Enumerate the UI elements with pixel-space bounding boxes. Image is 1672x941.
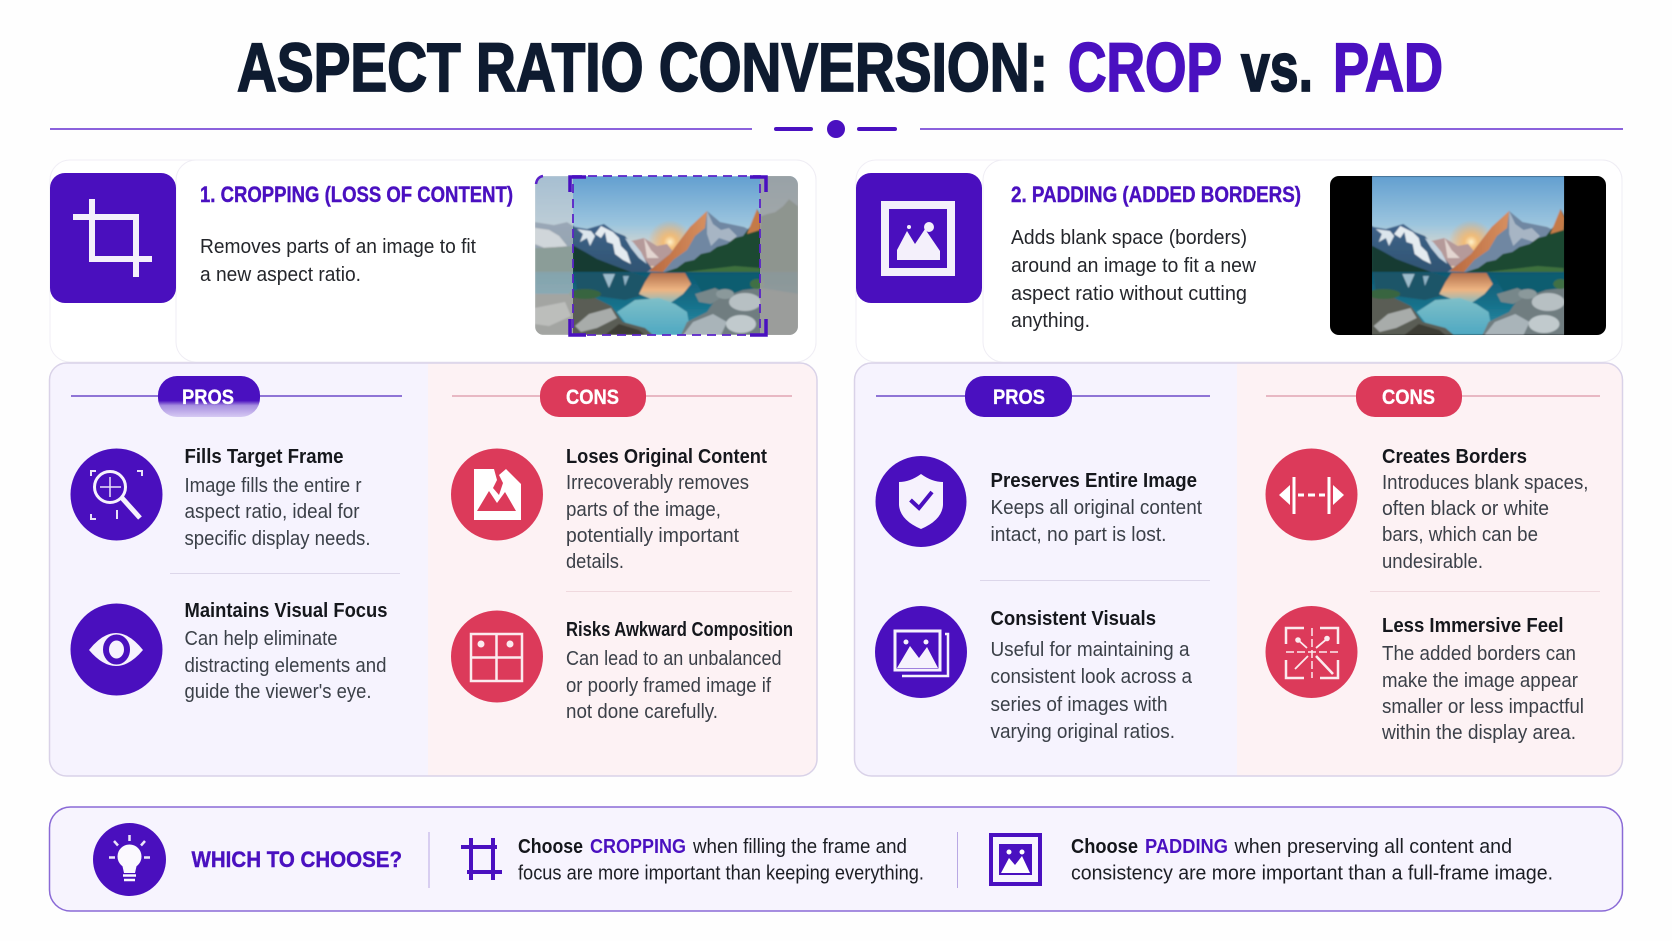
con item: risks awkward composition: Can lead to an unbalanced — [566, 648, 782, 670]
text: padding description — [1011, 227, 1257, 332]
text: choose padding — [1071, 836, 1553, 884]
icon: eye — [70, 604, 162, 696]
panel: padding intro card — [856, 160, 1622, 362]
pro item: maintains visual focus: guide the viewer's eye. — [184, 681, 372, 703]
con item: loses original content: potentially important — [566, 525, 739, 547]
pro item: fills target frame: Image fills the entire r — [184, 475, 362, 497]
heading: padding: 2. PADDING (ADDED BORDERS) — [1011, 182, 1301, 207]
pro item: maintains visual focus: distracting elements and — [184, 655, 386, 677]
icon: shield with check — [876, 456, 966, 547]
panel: cropping pros and cons — [50, 363, 817, 776]
image: padded landscape with black bars — [1330, 176, 1606, 335]
pro item: fills target frame: aspect ratio, ideal for — [184, 501, 360, 523]
pro item: consistent visuals: series of images with — [990, 694, 1168, 716]
text: choose cropping: CROPPING — [590, 836, 686, 858]
con item: loses original content: parts of the image, — [566, 499, 721, 521]
header: cons — [452, 376, 792, 417]
text: cropping description: a new aspect ratio. — [200, 264, 361, 286]
pro item: consistent visuals: consistent look across a — [990, 666, 1193, 688]
con item: creates borders: bars, which can be — [1382, 524, 1538, 546]
title: vs. — [1241, 29, 1313, 106]
icon: light bulb — [93, 823, 166, 896]
pro item: preserves entire image: Keeps all original content — [990, 497, 1202, 519]
header: pros: PROS — [993, 386, 1045, 409]
con item: loses original content: details. — [566, 551, 624, 573]
title: CROP — [1068, 29, 1222, 106]
title: ASPECT RATIO CONVERSION: — [237, 29, 1048, 106]
icon: stacked images — [875, 606, 967, 698]
pro item: maintains visual focus: Can help eliminate — [184, 628, 338, 650]
text: choose padding: Choose — [1071, 836, 1138, 858]
text: padding description: aspect ratio without cutting — [1011, 283, 1247, 305]
con item: creates borders: undesirable. — [1382, 551, 1483, 573]
con item: creates borders: often black or white — [1382, 498, 1549, 520]
heading: cropping: 1. CROPPING (LOSS OF CONTENT) — [200, 182, 513, 207]
header: pros — [876, 376, 1210, 417]
con item: loses original content: Loses Original Content — [566, 446, 767, 468]
text: cropping description — [200, 236, 476, 286]
con item: less immersive feel: smaller or less impactful — [1382, 696, 1584, 718]
header: pros: PROS — [182, 386, 234, 409]
pro item: consistent visuals: Consistent Visuals — [990, 608, 1156, 630]
title: PAD — [1333, 29, 1443, 106]
header: pros — [71, 376, 402, 417]
text: padding description: anything. — [1011, 310, 1090, 332]
text: choose cropping: focus are more important than keeping everything. — [518, 862, 924, 884]
image: cropped landscape with crop marks — [535, 176, 798, 335]
text: cropping description: Removes parts of an image to fit — [200, 236, 476, 258]
con item: less immersive feel: make the image appear — [1382, 670, 1578, 692]
text: padding description: around an image to fit a new — [1011, 255, 1257, 277]
pro item: consistent visuals: varying original ratios. — [990, 721, 1175, 743]
text: choose padding: PADDING — [1145, 836, 1228, 858]
con item: less immersive feel: The added borders can — [1382, 643, 1576, 665]
con item: less immersive feel: within the display area. — [1381, 722, 1576, 744]
icon: width arrows between bars — [1266, 448, 1358, 540]
header: cons: CONS — [1382, 386, 1435, 409]
icon: crop small — [461, 838, 502, 880]
pro item: preserves entire image: intact, no part is lost. — [990, 524, 1166, 546]
con item: risks awkward composition: Risks Awkward Composition — [566, 619, 793, 641]
heading: which to choose: WHICH TO CHOOSE? — [192, 847, 402, 872]
icon: frame with inward arrows — [1266, 606, 1358, 698]
header: cons — [1266, 376, 1600, 417]
text: choose cropping — [518, 836, 924, 884]
pro item: preserves entire image — [876, 456, 1202, 547]
text: choose padding: when preserving all content and — [1234, 836, 1512, 858]
pro item: maintains visual focus — [70, 600, 388, 703]
con item: creates borders — [1266, 446, 1588, 573]
con item: loses original content — [451, 446, 767, 573]
con item: risks awkward composition: not done carefully. — [566, 701, 718, 723]
con item: loses original content: Irrecoverably removes — [566, 472, 749, 494]
con item: creates borders: Creates Borders — [1382, 446, 1527, 468]
icon: four-pane grid — [451, 610, 543, 702]
text: choose cropping: when filling the frame and — [692, 836, 907, 858]
icon: magnifier — [70, 448, 162, 540]
panel: padding pros and cons — [854, 363, 1622, 776]
header: cons: CONS — [566, 386, 619, 409]
pro item: consistent visuals — [875, 606, 1193, 743]
icon: padded frame small — [991, 835, 1040, 884]
pro item: preserves entire image: Preserves Entire Image — [990, 470, 1197, 492]
icon: framed image — [856, 173, 982, 303]
con item: less immersive feel: Less Immersive Feel — [1382, 615, 1564, 637]
text: choose padding: consistency are more important than a full-frame image. — [1071, 862, 1553, 884]
pro item: maintains visual focus: Maintains Visual Focus — [184, 600, 388, 622]
panel: cropping intro card — [50, 160, 816, 362]
con item: creates borders: Introduces blank spaces, — [1382, 472, 1588, 494]
icon: crop — [50, 173, 176, 303]
icon: broken image — [451, 448, 543, 540]
panel: which to choose — [50, 807, 1622, 911]
con item: risks awkward composition: or poorly framed image if — [566, 675, 771, 697]
pro item: fills target frame: specific display needs. — [184, 528, 370, 550]
con item: less immersive feel — [1266, 606, 1584, 744]
text: choose cropping: Choose — [518, 836, 583, 858]
pro item: consistent visuals: Useful for maintaining a — [990, 639, 1190, 661]
con item: risks awkward composition — [451, 610, 793, 723]
text: padding description: Adds blank space (borders) — [1011, 227, 1247, 249]
pro item: fills target frame — [70, 446, 370, 550]
pro item: fills target frame: Fills Target Frame — [184, 446, 344, 468]
